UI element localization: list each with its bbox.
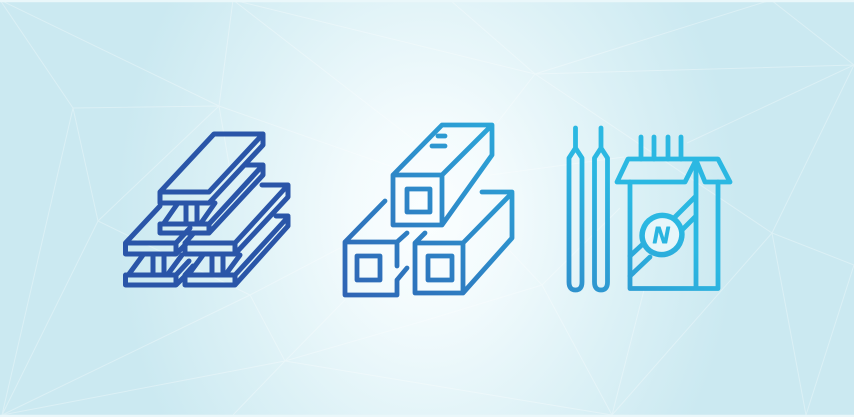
label circle xyxy=(635,208,689,262)
letter N: N xyxy=(653,222,670,248)
lower right beam xyxy=(185,185,288,285)
icon: stacked steel I-beams xyxy=(126,134,288,285)
lower right tube xyxy=(415,192,512,293)
electrode package xyxy=(617,137,730,288)
icon: stacked square tubes xyxy=(345,125,512,295)
top beam xyxy=(160,134,263,233)
icon: welding electrodes and package xyxy=(569,128,730,290)
lower left beam xyxy=(126,206,190,285)
electrode 2 xyxy=(594,128,608,290)
lower left tube xyxy=(345,201,407,295)
top tube xyxy=(393,125,492,225)
electrode 1 xyxy=(569,128,582,290)
